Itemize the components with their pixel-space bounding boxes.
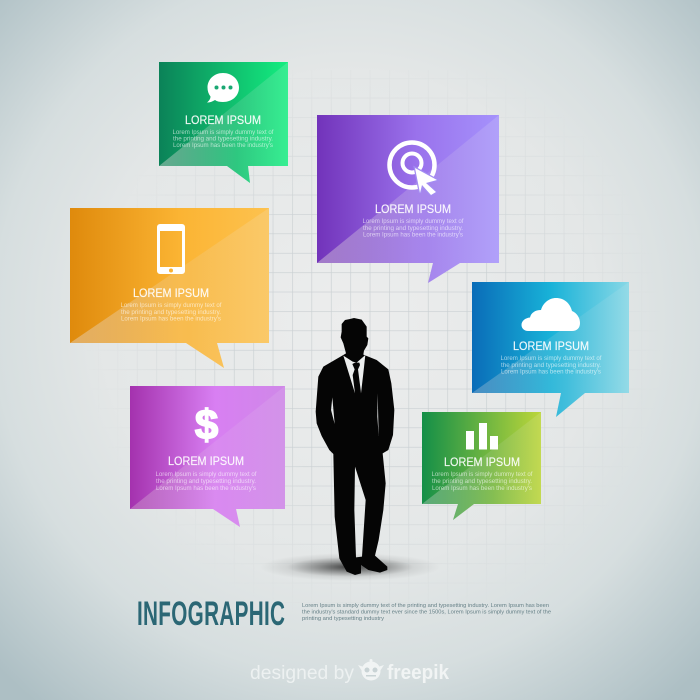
footer description	[302, 603, 551, 622]
icon: target and cursor	[390, 142, 437, 195]
shirt collar	[343, 355, 365, 393]
text block	[362, 218, 464, 238]
text block	[432, 471, 533, 492]
heading: LOREM IPSUM	[168, 456, 244, 468]
text block: the printing and typesetting industry.	[121, 309, 221, 316]
icon: chat bubble	[207, 73, 239, 102]
heading: LOREM IPSUM	[375, 204, 451, 216]
text block: the printing and typesetting industry.	[363, 225, 463, 232]
figure body	[316, 318, 394, 575]
speech bubble	[317, 115, 499, 283]
icon: bar chart	[466, 423, 498, 450]
text block: Lorem Ipsum is simply dummy text of	[120, 302, 222, 309]
text block: Lorem Ipsum is simply dummy text of	[156, 471, 257, 478]
panel: mobile	[70, 208, 269, 368]
footer description: the industry's standard dummy text ever since the 1500s, Lorem Ipsum is simply dummy text of the	[302, 610, 551, 616]
diagonal highlight	[70, 208, 269, 368]
text block: Lorem Ipsum is simply dummy text of	[362, 218, 464, 225]
speech bubble	[130, 386, 285, 527]
heading: LOREM IPSUM	[513, 341, 589, 353]
panel: cloud	[472, 282, 629, 417]
text block: Lorem Ipsum has been the industry's	[173, 142, 273, 149]
text block: the printing and typesetting industry.	[173, 136, 273, 142]
text block	[500, 355, 602, 376]
speech bubble	[70, 208, 269, 368]
diagonal highlight	[422, 412, 541, 520]
panel: finance	[130, 386, 285, 527]
text block: Lorem Ipsum has been the industry's	[121, 316, 221, 322]
text block: the printing and typesetting industry.	[501, 362, 601, 369]
text block	[120, 302, 222, 322]
panel: statistics	[422, 412, 541, 520]
text block: the printing and typesetting industry.	[432, 478, 532, 485]
speech bubble	[159, 62, 288, 183]
businessman silhouette	[316, 318, 394, 575]
floor shadow	[260, 553, 440, 581]
footer description: printing and typesetting industry	[302, 616, 384, 622]
text block: Lorem Ipsum has been the industry's	[501, 368, 601, 376]
watermark: freepik	[387, 662, 450, 684]
heading: LOREM IPSUM	[444, 457, 520, 469]
icon: dollar sign: $	[195, 401, 218, 448]
speech bubble	[472, 282, 629, 417]
watermark	[250, 659, 450, 684]
text block: Lorem Ipsum is simply dummy text of	[432, 471, 533, 478]
main title: INFOGRAPHIC	[137, 595, 285, 633]
speech bubble	[422, 412, 541, 520]
heading: LOREM IPSUM	[133, 288, 209, 300]
panel: target	[317, 115, 499, 283]
footer description: Lorem Ipsum is simply dummy text of the printing and typesetting industry. Lorem Ipsum has been	[302, 603, 549, 609]
watermark: designed by	[250, 663, 355, 684]
text block: the printing and typesetting industry.	[156, 478, 256, 485]
diagonal highlight	[130, 386, 285, 527]
text block: Lorem Ipsum has been the industry's	[432, 485, 532, 492]
text block: Lorem Ipsum has been the industry's	[156, 485, 256, 492]
text block: Lorem Ipsum is simply dummy text of	[500, 355, 602, 362]
diagonal highlight	[159, 62, 288, 183]
icon: smartphone	[157, 224, 185, 274]
icon: cloud	[522, 298, 580, 331]
panel: chat	[159, 62, 288, 183]
diagonal highlight	[317, 115, 499, 283]
heading: LOREM IPSUM	[185, 115, 261, 127]
icon: freepik mascot	[358, 659, 384, 680]
text block: Lorem Ipsum is simply dummy text of	[172, 129, 274, 136]
text block	[156, 471, 257, 492]
background grid	[134, 89, 603, 576]
diagonal highlight	[472, 282, 629, 417]
text block: Lorem Ipsum has been the industry's	[363, 232, 463, 238]
text block	[172, 129, 274, 149]
